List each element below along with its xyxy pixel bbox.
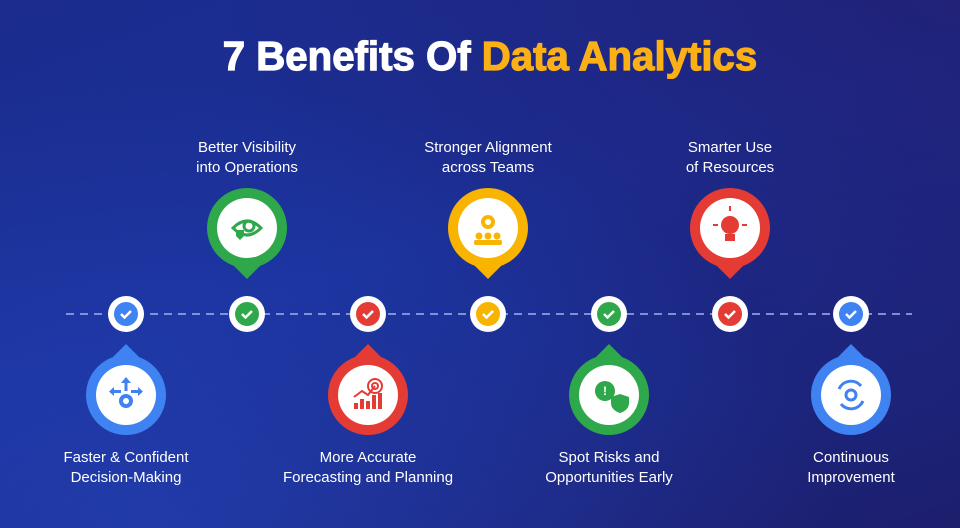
label 5: Opportunities Early [545,469,673,486]
label 7 [807,449,895,486]
pin 5: risks (green) [569,344,649,435]
pin 3: forecasting (red) [328,344,408,435]
label 6: of Resources [686,159,774,176]
label 6: Smarter Use [688,139,772,156]
pin 2: visibility (green) [207,188,287,279]
pin 6: resources (red) [690,188,770,279]
label 2 [196,139,298,176]
check markers [108,296,869,332]
label 4 [424,139,552,176]
label 1 [63,449,189,486]
pin 7: improvement (blue) [811,344,891,435]
label 4: Stronger Alignment [424,139,552,156]
pin 4: alignment (yellow) [448,188,528,279]
label 2: into Operations [196,159,298,176]
label 6 [686,139,774,176]
label 2: Better Visibility [198,139,296,156]
label 1: Faster & Confident [63,449,189,466]
label 7: Continuous [813,449,889,466]
label 4: across Teams [442,159,534,176]
pin 1: faster decisions (blue) [86,344,166,435]
label 3 [283,449,453,486]
label 5: Spot Risks and [559,449,659,466]
label 1: Decision-Making [71,469,181,486]
title: 7 Benefits Of Data Analytics [223,33,757,79]
pin 5: risks (green): ! [603,384,607,398]
label 7: Improvement [807,469,895,486]
label 5 [545,449,673,486]
label 3: More Accurate [320,449,416,466]
label 3: Forecasting and Planning [283,469,453,486]
